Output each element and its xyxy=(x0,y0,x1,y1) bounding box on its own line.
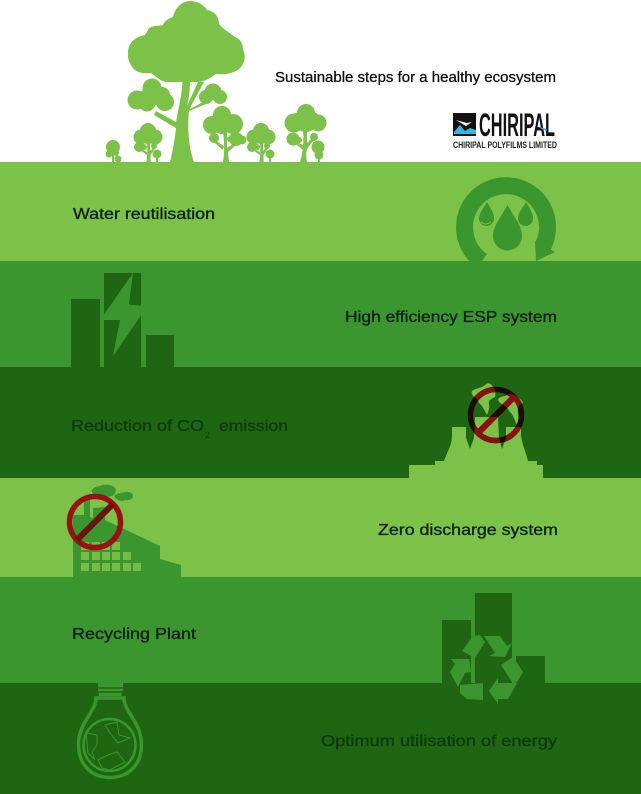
globe xyxy=(84,719,136,771)
icon: power bars with lightning xyxy=(71,273,174,367)
towers xyxy=(409,417,543,478)
icon: light bulb with globe xyxy=(78,683,142,778)
no symbol xyxy=(70,496,120,548)
label: Recycling Plant xyxy=(72,626,197,643)
icon: tree 2 xyxy=(203,106,246,162)
subscript: 2 xyxy=(205,430,210,440)
bulb neck xyxy=(98,683,123,696)
icon: tree 6 xyxy=(106,140,122,162)
continents xyxy=(86,722,130,770)
label: Reduction of CO xyxy=(71,418,204,435)
recycling arrows xyxy=(450,635,523,704)
label: emission xyxy=(219,418,288,435)
logo subtitle: CHIRIPAL POLYFILMS LIMITED xyxy=(453,140,557,150)
panel: CO2 reduction band xyxy=(0,367,641,478)
logo wordmark: CHIRIPAL xyxy=(479,107,555,143)
panel: water reutilisation band xyxy=(0,162,641,261)
panel: zero discharge band xyxy=(0,478,641,577)
label: Water reutilisation xyxy=(73,206,215,223)
icon: factory with no symbol xyxy=(70,485,181,577)
label: Zero discharge system xyxy=(378,522,558,539)
icon: cooling towers with no symbol xyxy=(409,383,543,478)
circular arrow xyxy=(465,186,555,261)
icon: bars with recycling arrows xyxy=(442,593,545,704)
label: Optimum utilisation of energy xyxy=(321,733,557,750)
windows xyxy=(81,542,141,571)
panel: ESP system band xyxy=(0,261,641,367)
panel: energy band xyxy=(0,683,641,794)
illustration: trees xyxy=(106,1,326,162)
water drops xyxy=(479,202,533,250)
logo mark xyxy=(453,113,476,136)
icon: tree 5 xyxy=(284,104,326,162)
label: High efficiency ESP system xyxy=(345,309,557,326)
icon: tree 3 xyxy=(134,123,162,162)
smoke xyxy=(472,383,495,415)
icon: main tree xyxy=(128,1,245,162)
bulb outline xyxy=(78,698,142,778)
logo: Chiripal xyxy=(453,107,557,150)
icon: tree 4 xyxy=(246,123,276,162)
heading: Sustainable steps for a healthy ecosystem xyxy=(275,70,556,86)
icon: water recycle xyxy=(465,186,555,261)
no symbol xyxy=(470,390,522,440)
factory xyxy=(73,500,181,577)
panel: recycling plant band xyxy=(0,577,641,683)
